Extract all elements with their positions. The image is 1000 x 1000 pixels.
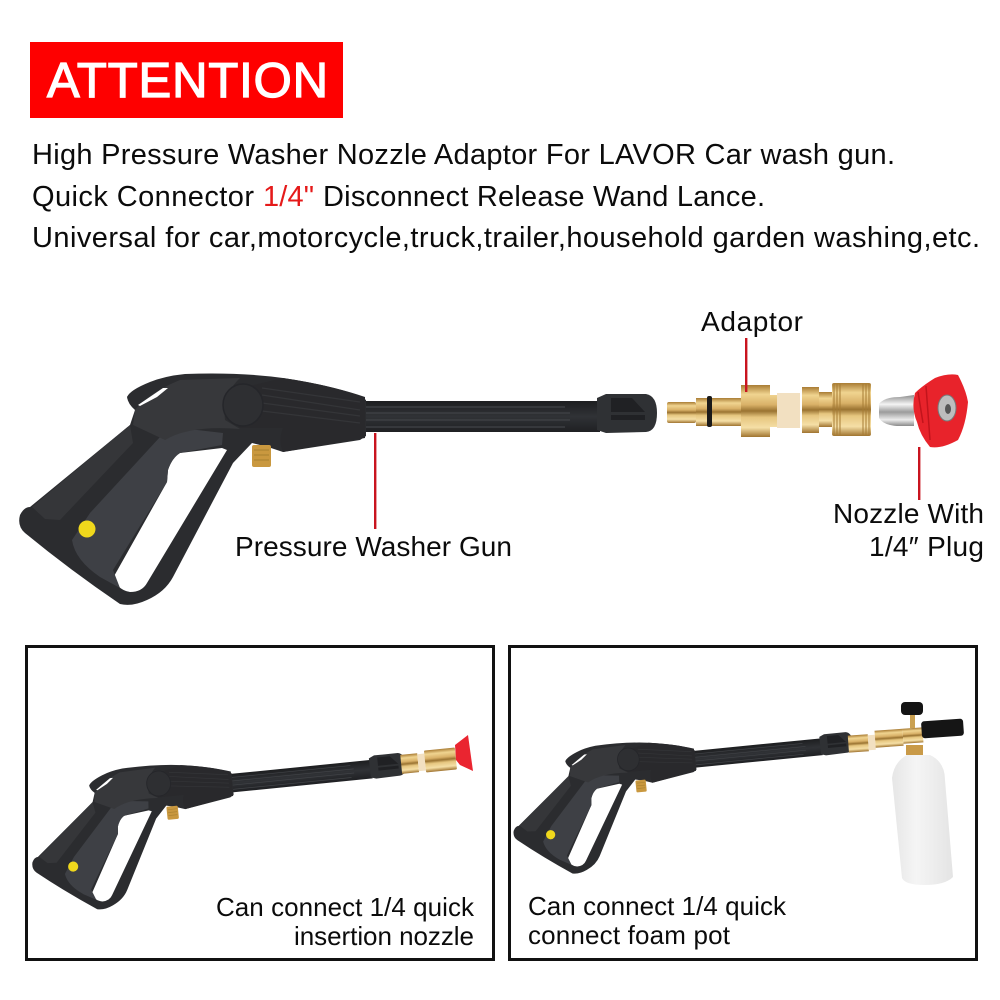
- caption: insertion nozzle: [294, 921, 474, 951]
- label: pressure washer gun: Pressure Washer Gun: [235, 531, 512, 562]
- label: adaptor: Adaptor: [701, 306, 803, 337]
- label: nozzle with plug: 1/4″ Plug: [869, 531, 984, 562]
- caption: Can connect 1/4 quick: [528, 891, 787, 921]
- foam bottle: [892, 755, 953, 885]
- caption: [216, 892, 475, 951]
- pressure washer gun: [19, 374, 657, 605]
- attention banner: [30, 42, 343, 118]
- gun with nozzle: [24, 735, 473, 916]
- panel: foam pot: [506, 646, 976, 960]
- caption: Can connect 1/4 quick: [216, 892, 475, 922]
- adaptor: [667, 383, 871, 437]
- panel: quick insertion nozzle: [24, 646, 493, 960]
- leader: nozzle: [918, 447, 920, 500]
- label: nozzle with plug: Nozzle With: [833, 498, 984, 529]
- gun with foam pot: [506, 702, 965, 885]
- intro text block: 1/4": [263, 181, 314, 213]
- intro text block: Universal for car,motorcycle,truck,trailer,household garden washing,etc.: [32, 222, 980, 254]
- intro text block: High Pressure Washer Nozzle Adaptor For LAVOR Car wash gun.: [32, 139, 895, 171]
- leader: adaptor: [745, 338, 747, 392]
- caption: [528, 891, 787, 950]
- leader: gun: [374, 433, 376, 529]
- intro text block: Quick Connector: [32, 181, 254, 213]
- intro text block: [32, 139, 980, 254]
- label: nozzle with plug: [833, 498, 984, 562]
- caption: connect foam pot: [528, 920, 731, 950]
- nozzle with plug: [879, 374, 968, 447]
- attention banner: ATTENTION: [47, 54, 328, 108]
- intro text block: Disconnect Release Wand Lance.: [323, 181, 765, 213]
